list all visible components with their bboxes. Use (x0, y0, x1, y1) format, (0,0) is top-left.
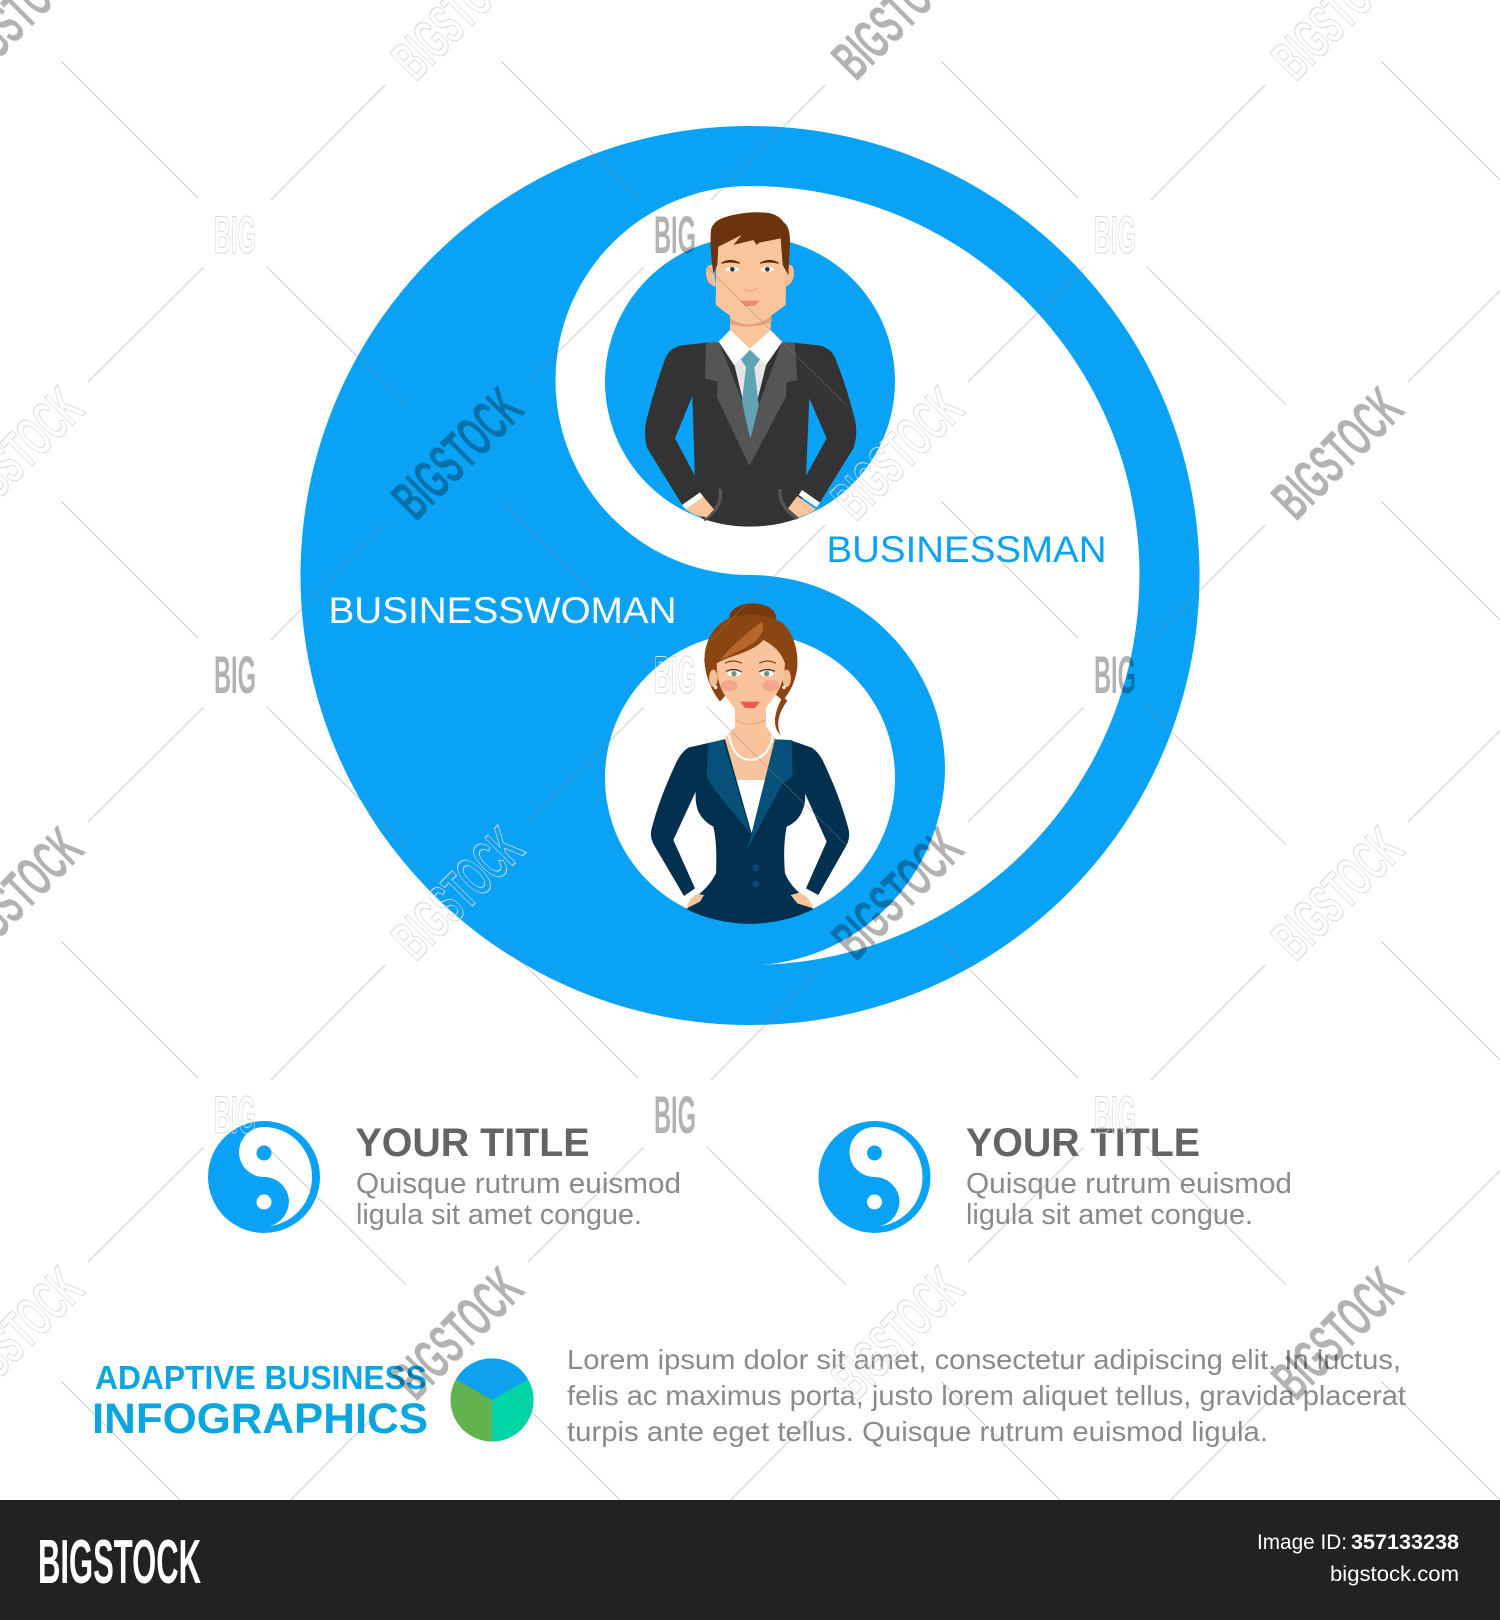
brand title: ADAPTIVE BUSINESS (95, 1360, 427, 1397)
watermark: diagonal BIGSTOCK: BIGSTOCK (820, 376, 975, 531)
man face (716, 233, 787, 321)
watermark: diagonal BIGSTOCK: BIGSTOCK (820, 1256, 975, 1411)
icon: three-segment pie (450, 1358, 534, 1442)
businessman figure (645, 212, 856, 527)
man tie (741, 350, 760, 441)
text: description right: Quisque rutrum euismod (966, 1168, 1292, 1200)
brand title (92, 1360, 428, 1443)
footer image id: Image ID: (1257, 1531, 1347, 1554)
man pockets (704, 489, 797, 520)
woman hair highlight (720, 622, 763, 660)
woman hands (687, 893, 813, 908)
watermark: diagonal BIGSTOCK: BIGSTOCK (380, 816, 535, 971)
man neck (730, 310, 771, 349)
man lapels (705, 343, 797, 466)
watermark: diagonal BIGSTOCK: BIGSTOCK (380, 1256, 535, 1411)
woman ears (709, 670, 718, 687)
footer image id: bigstock.com (1330, 1563, 1459, 1586)
yin-yang main diagram (300, 126, 1200, 1025)
woman hair back and bun (729, 603, 776, 631)
watermark: BIG labels: BIG (654, 206, 696, 265)
white circle behind businesswoman (605, 633, 895, 923)
text: BIG (1094, 1086, 1136, 1145)
text: description left (356, 1168, 681, 1231)
watermark: diagonal BIGSTOCK: BIGSTOCK (820, 816, 975, 971)
footer logo: BIGSTOCK (38, 1528, 201, 1597)
legend item 1 (208, 1121, 681, 1233)
man hands and cuffs (685, 496, 816, 517)
text: lorem paragraph: felis ac maximus porta, justo lorem aliquet tellus, gravida placerat (567, 1380, 1406, 1411)
footer image id (1257, 1531, 1459, 1586)
woman blouse (736, 780, 765, 833)
woman buttons (752, 864, 759, 871)
text: description left: ligula sit amet congue. (356, 1199, 642, 1231)
businesswoman figure (651, 603, 849, 924)
icon: yin-yang left (208, 1121, 320, 1233)
woman cheeks and eyes (721, 680, 738, 691)
text: lorem paragraph: Lorem ipsum dolor sit amet, consectetur adipiscing elit. In luctus, (567, 1344, 1401, 1375)
text: description right: ligula sit amet congue. (966, 1199, 1253, 1231)
man eyes and brows (721, 260, 779, 263)
heading: your title left: YOUR TITLE (356, 1121, 590, 1165)
footer banner (0, 1500, 1500, 1620)
text: lorem paragraph: turpis ante eget tellus. Quisque rutrum euismod ligula. (567, 1416, 1268, 1447)
man hair (711, 212, 790, 275)
woman neck and chest (723, 707, 777, 783)
text: description right (966, 1168, 1292, 1231)
blue outer disc (300, 126, 1200, 1025)
watermark: BIG labels: BIG (654, 1086, 696, 1145)
woman face (717, 640, 785, 724)
legend item 2 (818, 1121, 1292, 1233)
man collar (719, 330, 782, 365)
text: BIG (1094, 206, 1136, 265)
watermark: diagonal BIGSTOCK: BIGSTOCK (380, 376, 535, 531)
watermark: BIG labels (214, 206, 1136, 1145)
icon: yin-yang right (818, 1121, 930, 1233)
watermark: BIG labels: BIG (214, 646, 256, 705)
man ears (706, 265, 794, 287)
text: description left: Quisque rutrum euismod (356, 1168, 681, 1200)
white swirl (556, 186, 1140, 965)
heading: your title right: YOUR TITLE (966, 1121, 1200, 1165)
watermark: BIG labels: BIG (654, 646, 696, 705)
man shirt (730, 347, 771, 430)
woman lapels (707, 739, 793, 851)
watermark: BIG labels: BIG (214, 206, 256, 265)
label: businesswoman: BUSINESSWOMAN (328, 589, 676, 631)
woman necklace (729, 735, 773, 760)
watermark: BIG labels: BIG (214, 1086, 256, 1145)
footer image id: 357133238 (1351, 1531, 1459, 1554)
brand title: INFOGRAPHICS (92, 1395, 428, 1443)
label: businessman: BUSINESSMAN (826, 528, 1106, 570)
woman jacket (651, 739, 849, 924)
text: lorem paragraph (567, 1344, 1406, 1447)
blue circle behind businessman (605, 236, 895, 526)
man jacket (645, 343, 856, 527)
text: BIG (1094, 646, 1136, 705)
